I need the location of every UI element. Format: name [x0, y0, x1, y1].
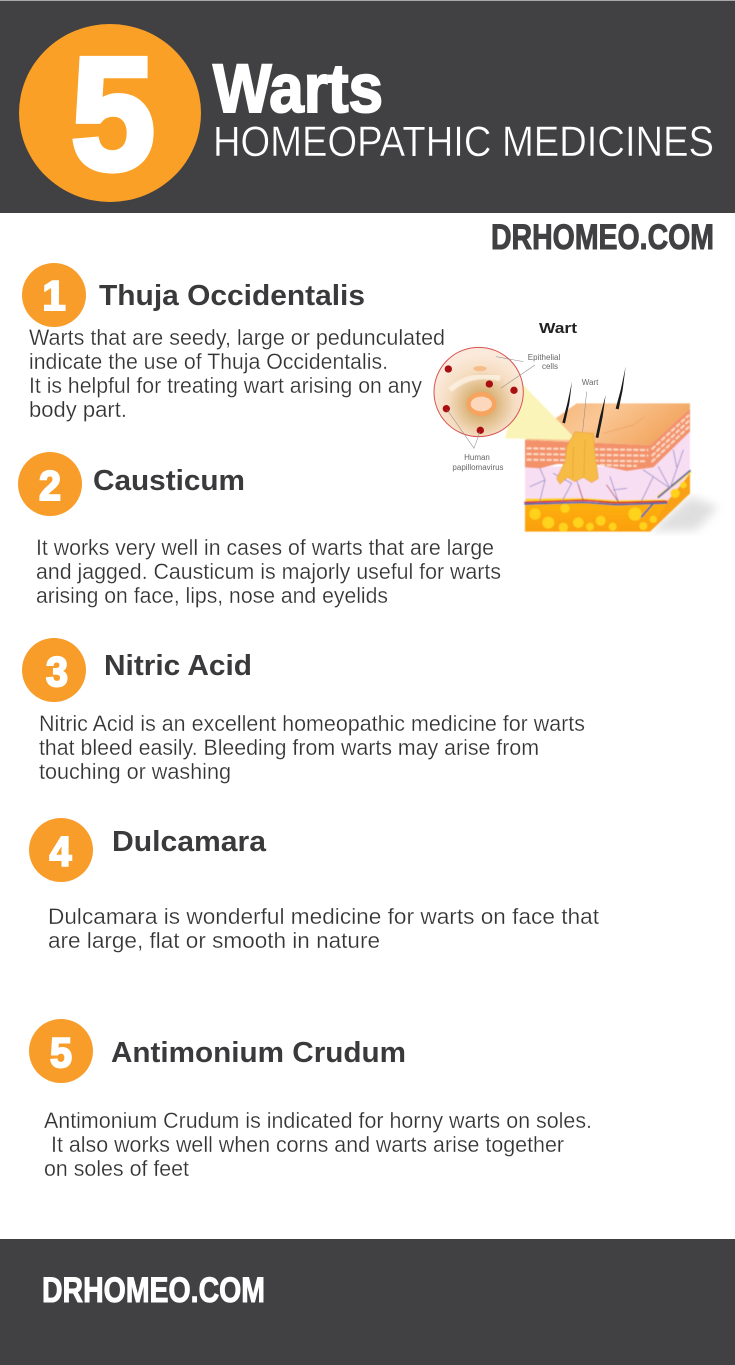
badge 5: 5: [50, 1029, 72, 1076]
block shadow: [650, 497, 718, 532]
badge 5: [29, 1019, 93, 1083]
magnifier cone: [505, 382, 577, 440]
item 4: Dulcamara: [29, 818, 599, 953]
magnified detail circle: [434, 347, 587, 448]
body 1: indicate the use of Thuja Occidentalis.: [29, 349, 388, 374]
body 3: Nitric Acid is an excellent homeopathic medicine for warts: [39, 711, 585, 736]
illustration label: human: Human: [464, 453, 490, 462]
illustration label: epithelial cells: Epithelial: [528, 353, 560, 362]
badge 3: 3: [46, 648, 68, 695]
badge 2: [18, 452, 82, 516]
illustration label: cells: cells: [542, 362, 558, 371]
item 1: Thuja Occidentalis: [22, 263, 445, 422]
body 4: Dulcamara is wonderful medicine for warts on face that: [48, 904, 599, 929]
body 2: It works very well in cases of warts that are large: [36, 535, 494, 560]
body 3: touching or washing: [39, 759, 231, 784]
leader lines: [447, 357, 587, 448]
heading 1: Thuja Occidentalis: [99, 280, 365, 312]
body 1: body part.: [29, 397, 127, 422]
illustration: wart skin diagram: [434, 320, 718, 532]
wart growth: [557, 432, 598, 484]
body 5: on soles of feet: [44, 1156, 189, 1181]
surface creases: [603, 417, 645, 433]
blood vessels: [525, 450, 690, 517]
footer band: [0, 1239, 735, 1365]
body 1: [29, 325, 445, 422]
title: Warts: [213, 50, 383, 127]
body 2: arising on face, lips, nose and eyelids: [36, 583, 388, 608]
heading 2: Causticum: [93, 465, 245, 497]
body 2: [36, 535, 501, 608]
body 1: Warts that are seedy, large or pedunculated: [29, 325, 445, 350]
illustration title: Wart: [539, 320, 577, 337]
header badge: number 5: 5: [71, 24, 155, 203]
badge 2: 2: [39, 462, 61, 509]
illustration label: wart: Wart: [582, 378, 599, 387]
item 3: Nitric Acid: [22, 638, 585, 784]
skin block: [505, 367, 718, 532]
body 5: Antimonium Crudum is indicated for horny warts on soles.: [44, 1108, 592, 1133]
body 5: It also works well when corns and warts arise together: [51, 1132, 564, 1157]
header band: [0, 0, 735, 213]
header badge: number 5: [19, 24, 201, 203]
body 4: [48, 904, 599, 953]
body 4: are large, flat or smooth in nature: [48, 928, 380, 953]
badge 1: 1: [42, 272, 66, 319]
skin surface: [525, 403, 690, 445]
fat layer: [525, 473, 690, 532]
badge 4: [29, 818, 93, 882]
body 1: It is helpful for treating wart arising on any: [29, 373, 422, 398]
badge 1: [22, 263, 86, 327]
badge 3: [22, 638, 86, 702]
illustration label: papillomavirus: papillomavirus: [452, 463, 504, 472]
virus dots: [443, 365, 518, 434]
website label bottom: DRHOMEO.COM: [42, 1271, 265, 1310]
item 5: Antimonium Crudum: [29, 1019, 592, 1181]
body 2: and jagged. Causticum is majorly useful for warts: [36, 559, 501, 584]
item 2: Causticum: [18, 452, 501, 608]
badge 4: 4: [50, 828, 72, 875]
body 5: [44, 1108, 592, 1181]
heading 3: Nitric Acid: [104, 650, 252, 682]
dermis: [525, 430, 690, 505]
body 3: that bleed easily. Bleeding from warts may arise from: [39, 735, 539, 760]
epidermis layer: [525, 408, 690, 471]
heading 5: Antimonium Crudum: [111, 1037, 406, 1069]
hairs: [562, 367, 626, 438]
body 3: [39, 711, 585, 784]
heading 4: Dulcamara: [112, 826, 267, 858]
